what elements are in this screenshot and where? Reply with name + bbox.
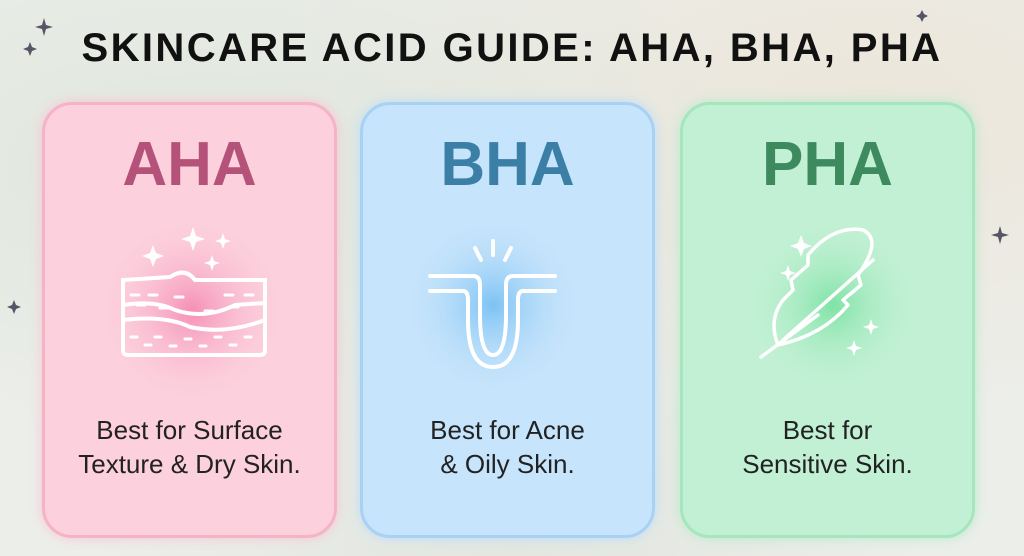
heading: PHA: PHA — [762, 130, 893, 199]
text: AHA description: Best for Surface — [96, 415, 283, 445]
text: PHA description: Sensitive Skin. — [742, 449, 913, 479]
text: PHA description: Best for — [783, 415, 872, 445]
text: BHA description: Best for Acne — [430, 415, 585, 445]
text: BHA description — [430, 415, 585, 479]
title: SKINCARE ACID GUIDE: AHA, BHA, PHA — [82, 26, 942, 70]
text: BHA description: & Oily Skin. — [440, 449, 575, 479]
heading: BHA: BHA — [440, 130, 575, 199]
text: AHA description — [78, 415, 301, 479]
text: AHA description: Texture & Dry Skin. — [78, 449, 301, 479]
icon: skin layers — [121, 228, 267, 372]
panel: AHA — [42, 102, 337, 538]
icon: pore — [428, 239, 557, 369]
heading: AHA: AHA — [122, 130, 257, 199]
icon: feather — [759, 228, 892, 364]
panel: PHA — [680, 102, 975, 538]
panel: BHA — [360, 102, 655, 538]
text: PHA description — [742, 415, 913, 479]
